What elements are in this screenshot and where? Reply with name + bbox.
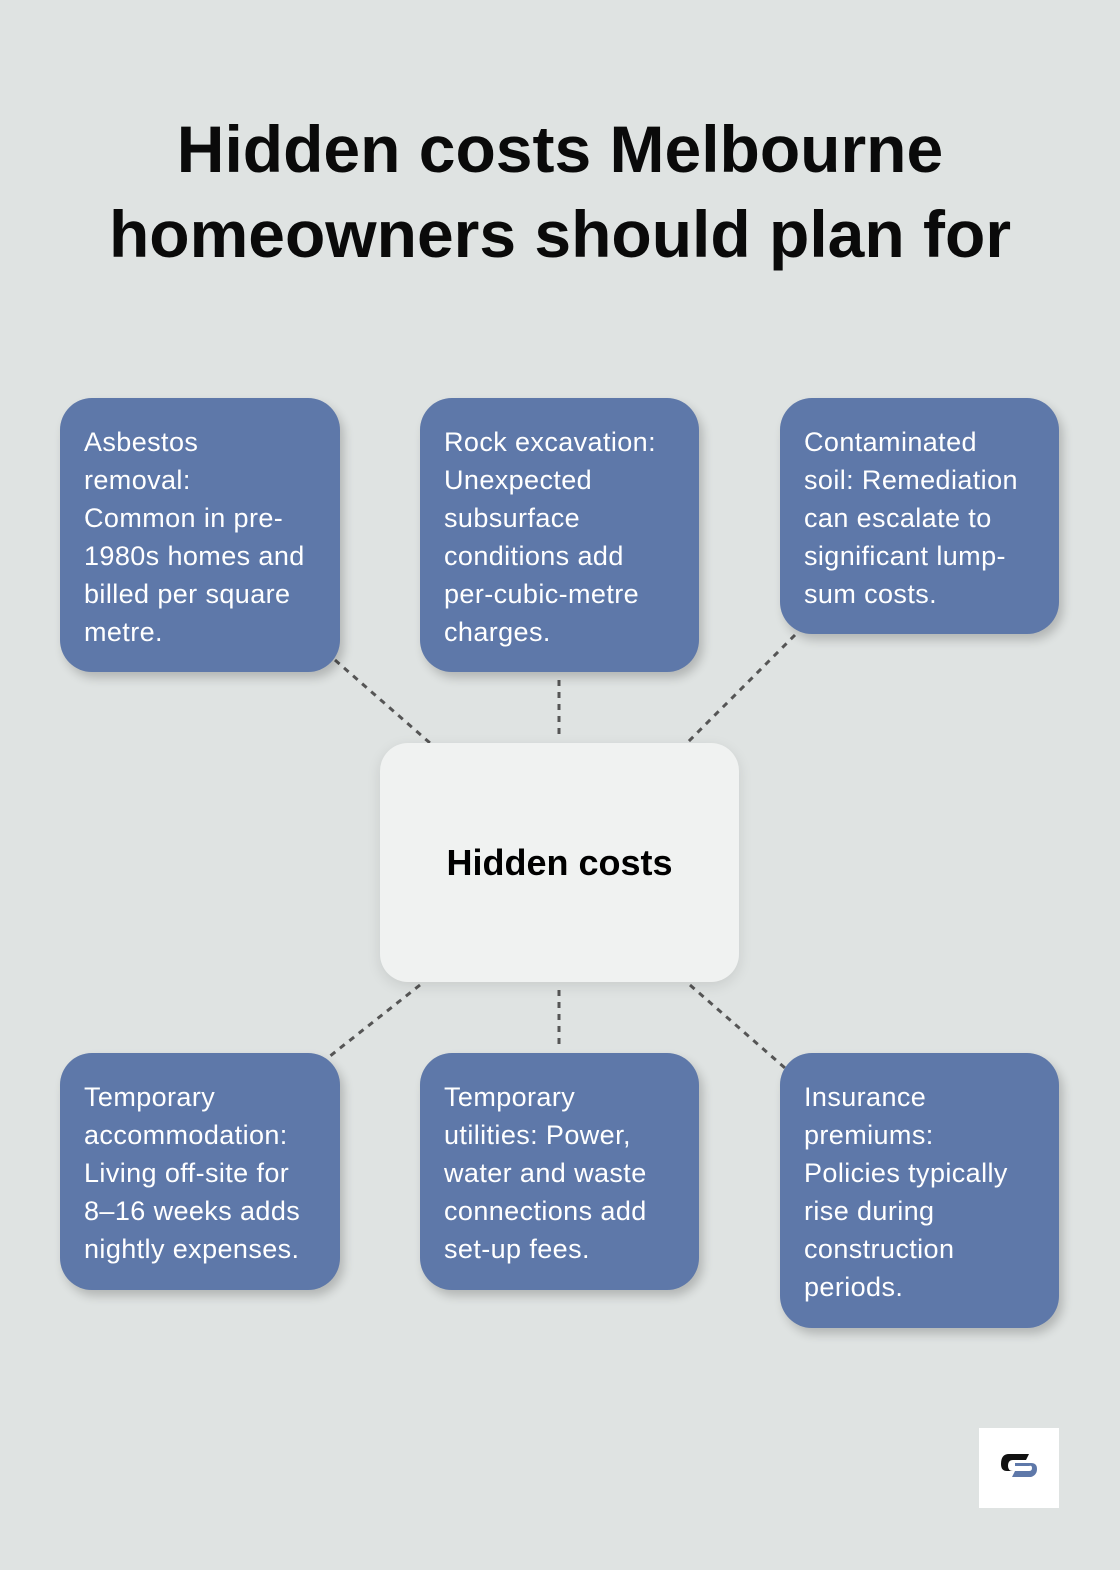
title: homeowners should plan for <box>109 197 1011 271</box>
panel: rock: Unexpected <box>444 465 592 495</box>
panel: soil: sum costs. <box>804 579 937 609</box>
panel: accommodation: nightly expenses. <box>84 1234 299 1264</box>
panel: utilities: utilities: Power, <box>444 1120 631 1150</box>
panel: asbestos: billed per square <box>84 579 290 609</box>
title: Hidden costs Melbourne <box>177 112 943 186</box>
panel: insurance: periods. <box>804 1272 903 1302</box>
panel: asbestos: Common in pre- <box>84 503 283 533</box>
panel: utilities: water and waste <box>444 1158 647 1188</box>
panel: insurance <box>780 1053 1059 1328</box>
panel: asbestos: Asbestos <box>84 427 198 457</box>
panel: soil: significant lump- <box>804 541 1006 571</box>
panel: asbestos: removal: <box>84 465 191 495</box>
panel: rock: per-cubic-metre <box>444 579 639 609</box>
panel: accommodation: Temporary <box>84 1082 215 1112</box>
panel: insurance: Insurance <box>804 1082 926 1112</box>
panel: accommodation: Living off-site for <box>84 1158 289 1188</box>
panel: soil: Contaminated <box>804 427 977 457</box>
icon: logo <box>979 1428 1059 1508</box>
panel: accommodation: accommodation: <box>84 1120 288 1150</box>
title <box>109 112 1011 271</box>
panel: insurance: Policies typically <box>804 1158 1008 1188</box>
panel: rock: charges. <box>444 617 551 647</box>
panel: rock: subsurface <box>444 503 580 533</box>
panel: asbestos: 1980s homes and <box>84 541 305 571</box>
panel: rock: conditions add <box>444 541 624 571</box>
panel: accommodation: 8–16 weeks adds <box>84 1196 300 1226</box>
panel: insurance: premiums: <box>804 1120 934 1150</box>
panel: utilities: Temporary <box>444 1082 575 1112</box>
panel: rock <box>420 398 699 672</box>
panel: insurance: construction <box>804 1234 954 1264</box>
panel: asbestos: metre. <box>84 617 163 647</box>
panel: rock: Rock excavation: <box>444 427 656 457</box>
panel: accommodation <box>60 1053 340 1290</box>
panel: utilities: connections add <box>444 1196 647 1226</box>
panel: soil: can escalate to <box>804 503 992 533</box>
panel: asbestos <box>60 398 340 672</box>
center node: Hidden costs <box>446 842 673 882</box>
panel: soil <box>780 398 1059 634</box>
panel: insurance: rise during <box>804 1196 934 1226</box>
center node <box>380 743 739 982</box>
panel: soil: soil: Remediation <box>804 465 1018 495</box>
panel: utilities <box>420 1053 699 1290</box>
panel: utilities: set-up fees. <box>444 1234 590 1264</box>
